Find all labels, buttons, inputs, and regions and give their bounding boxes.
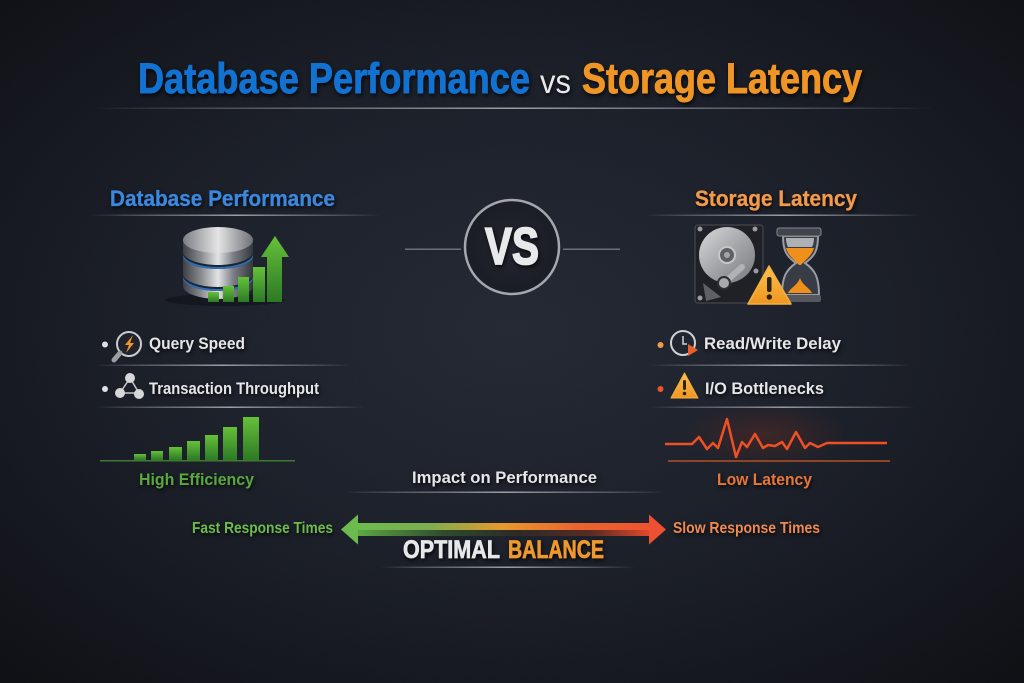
- warning triangle: [748, 266, 791, 304]
- hourglass: [777, 228, 821, 302]
- label: fast response times: Fast Response Times: [192, 520, 333, 537]
- chart: high efficiency bars: [100, 417, 295, 462]
- vs badge: [405, 200, 620, 294]
- title: Storage Latency: [582, 55, 862, 103]
- label: high efficiency: High Efficiency: [139, 470, 255, 489]
- list item: transaction throughput: [102, 373, 319, 399]
- list item: i/o bottlenecks: [658, 373, 824, 398]
- label: slow response times: Slow Response Times: [673, 520, 820, 537]
- list item: i/o bottlenecks: I/O Bottlenecks: [705, 379, 824, 398]
- list item: transaction throughput: Transaction Throughput: [149, 379, 319, 398]
- vs badge: VS: [485, 218, 539, 276]
- list item: read/write delay: [658, 331, 842, 356]
- heading: database performance: Database Performance: [110, 186, 335, 211]
- optimal balance: BALANCE: [508, 536, 604, 564]
- optimal balance: OPTIMAL: [403, 536, 500, 564]
- icon: database with growth chart: [165, 227, 289, 306]
- chart: latency pulse: [665, 403, 890, 467]
- label: low latency: Low Latency: [717, 470, 812, 489]
- optimal balance: [403, 536, 604, 564]
- panel: storage latency: [645, 186, 920, 489]
- arrow: response time scale: [341, 514, 666, 544]
- icon: hard drive, hourglass and warning: [695, 225, 821, 304]
- title: Database Performance: [138, 55, 530, 103]
- title: vs: [540, 63, 571, 100]
- heading: impact on performance: Impact on Performance: [412, 468, 597, 487]
- heading: storage latency: Storage Latency: [695, 186, 858, 211]
- panel: impact on performance: [192, 468, 820, 568]
- list item: read/write delay: Read/Write Delay: [704, 334, 842, 353]
- list item: query speed: Query Speed: [149, 334, 245, 353]
- list item: query speed: [102, 332, 245, 360]
- panel: database performance: [90, 186, 380, 489]
- title: [138, 55, 862, 103]
